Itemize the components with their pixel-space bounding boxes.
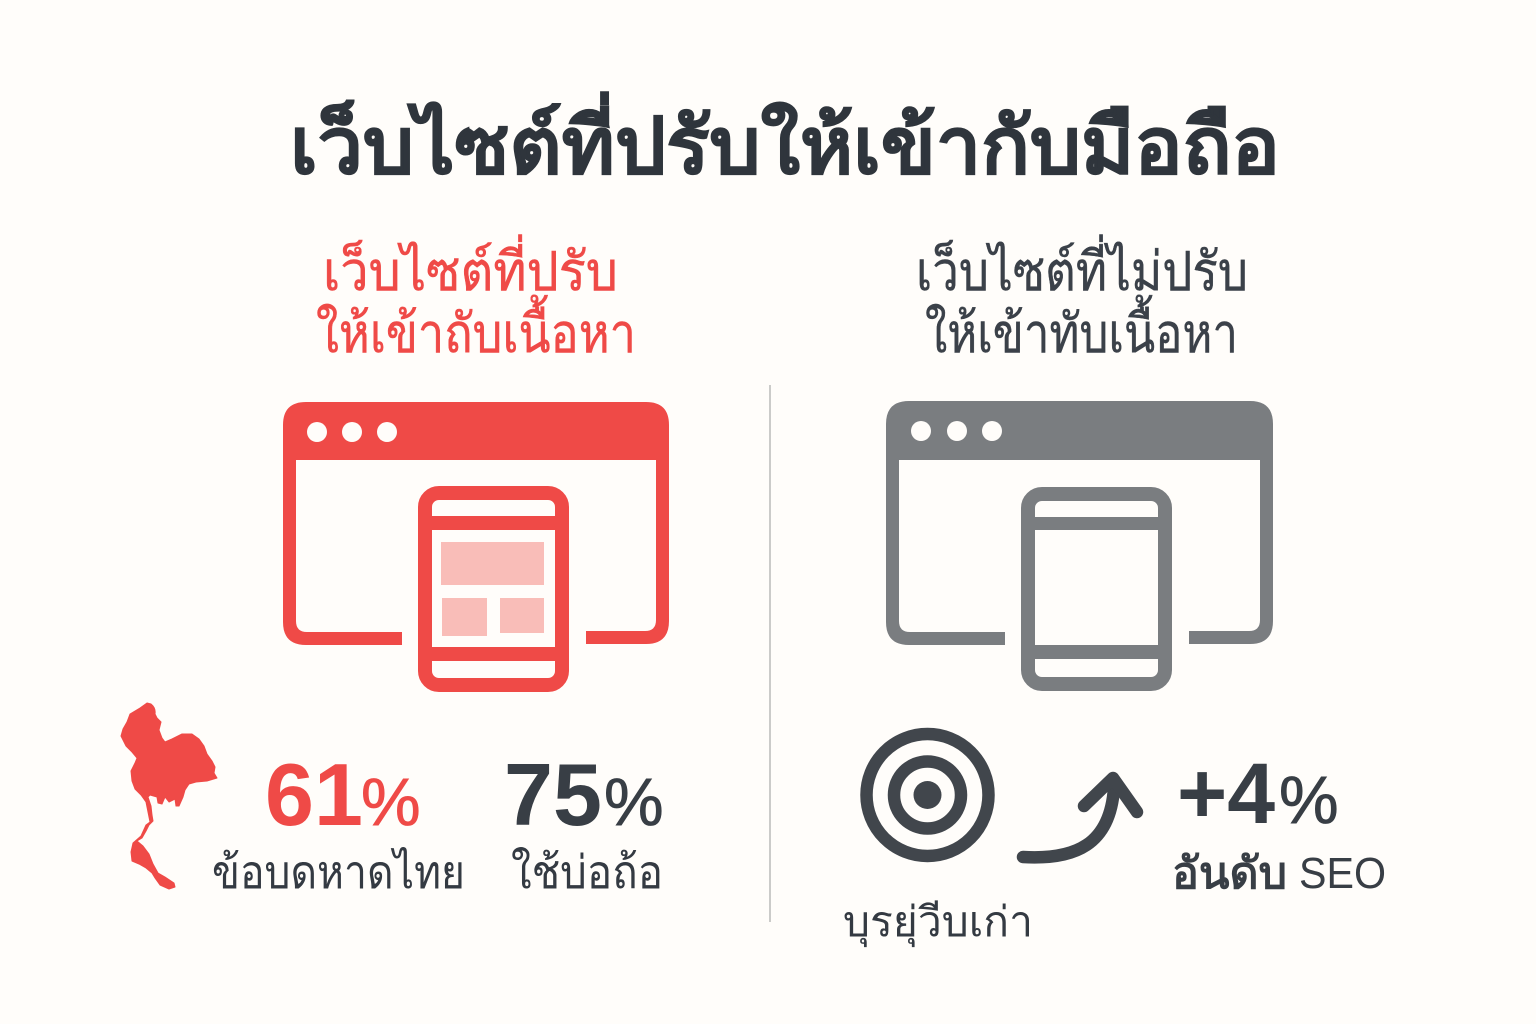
stat: plus 4 percent: +4 <box>1177 746 1275 842</box>
label: SEO rank: SEO <box>1299 849 1386 898</box>
icon: red browser window with responsive phone <box>283 402 669 685</box>
label: SEO rank: อันดับ <box>1172 849 1287 898</box>
heading: non-responsive column: ให้เข้าทับเนื้อหา <box>925 295 1238 364</box>
label: 75 percent: ใช้บ่อถ้อ <box>511 846 663 898</box>
label: old target: บุรยุ่วีบเก่า <box>843 898 1033 948</box>
label: 61 percent: ข้อบดหาดไทย <box>212 846 465 898</box>
heading: responsive column: เว็บไซต์ที่ปรับ <box>323 234 618 302</box>
stat: 75 percent: % <box>604 765 664 840</box>
stat: 75 percent: 75 <box>504 745 602 844</box>
stat: 75 percent <box>504 745 664 898</box>
heading: non-responsive column <box>916 234 1248 364</box>
stat: 61 percent: 61 <box>265 745 363 844</box>
icon: Thailand map <box>121 703 217 889</box>
stat: 61 percent: % <box>361 765 421 840</box>
stat: plus 4 percent: % <box>1279 763 1339 838</box>
heading: non-responsive column: เว็บไซต์ที่ไม่ปรับ <box>916 234 1248 302</box>
arrow: upward <box>1023 778 1137 857</box>
heading: responsive column: ให้เข้าถับเนื้อหา <box>316 295 636 364</box>
stat: plus 4 percent <box>1177 746 1339 842</box>
icon: target <box>866 734 988 856</box>
heading: responsive column <box>316 234 636 364</box>
title: เว็บไซต์ที่ปรับให้เข้ากับมือถือ <box>290 91 1280 190</box>
label: SEO rank <box>1172 849 1386 898</box>
stat: 61 percent <box>212 745 465 898</box>
divider <box>769 385 771 922</box>
icon: grey browser window with phone <box>886 401 1273 684</box>
